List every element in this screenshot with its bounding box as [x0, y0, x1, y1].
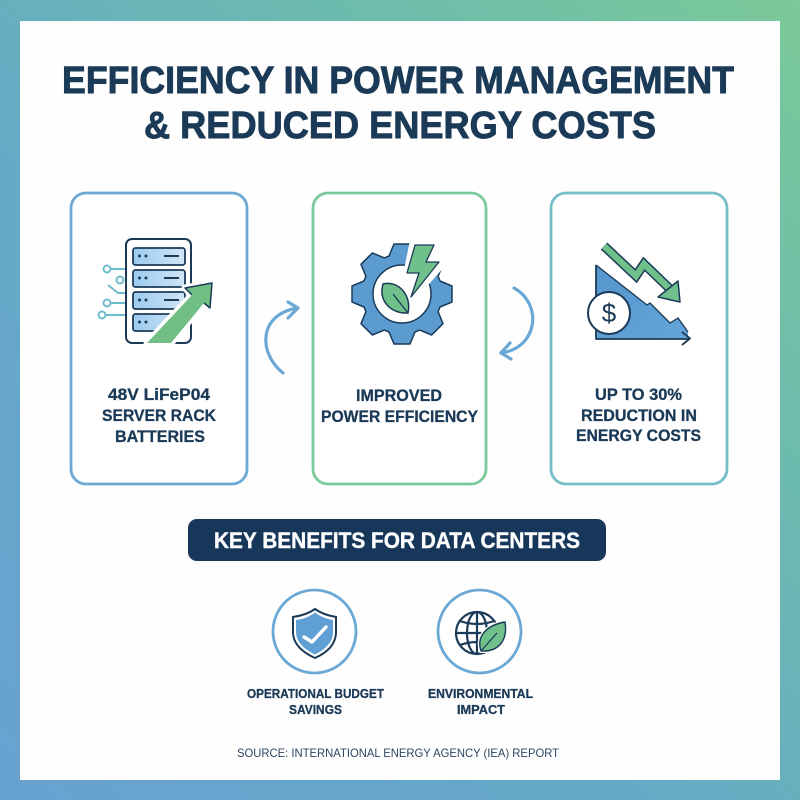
- source note: SOURCE: INTERNATIONAL ENERGY AGENCY (IEA) REPORT: [237, 746, 560, 760]
- icon: globe with leaf: [438, 590, 521, 673]
- heading: key benefits: KEY BENEFITS FOR DATA CENTERS: [214, 528, 580, 553]
- card label: [102, 386, 216, 446]
- card label: BATTERIES: [115, 428, 205, 446]
- title: & REDUCED ENERGY COSTS: [144, 105, 656, 147]
- card label: IMPROVED: [356, 387, 442, 405]
- card label: POWER EFFICIENCY: [321, 408, 478, 426]
- icon: falling cost chart with dollar coin: [588, 246, 690, 345]
- panel: energy cost reduction: [551, 193, 727, 484]
- icon: server rack with rising arrow: [98, 239, 212, 343]
- icon: shield with check: [273, 590, 356, 673]
- label: OPERATIONAL BUDGET: [247, 687, 384, 701]
- card label: [576, 386, 701, 445]
- label: ENVIRONMENTAL: [428, 687, 533, 701]
- card label: [321, 387, 478, 426]
- benefit: environmental impact: [428, 590, 533, 717]
- icon: gear with bolt and leaf: [352, 240, 452, 344]
- heading: key benefits: [188, 519, 606, 561]
- label: IMPACT: [457, 703, 505, 717]
- card label: UP TO 30%: [595, 386, 682, 404]
- title: [62, 60, 734, 147]
- benefit: operational budget savings: [247, 590, 384, 717]
- card label: ENERGY COSTS: [576, 427, 701, 445]
- icon: falling cost chart with dollar coin: $: [602, 298, 617, 328]
- card label: SERVER RACK: [102, 407, 216, 425]
- label: [247, 687, 384, 717]
- card label: 48V LiFeP04: [108, 386, 211, 404]
- arrow: efficiency to cost reduction: [501, 288, 533, 359]
- label: [428, 687, 533, 717]
- panel: improved power efficiency: [313, 193, 486, 484]
- label: SAVINGS: [289, 703, 342, 717]
- arrow: batteries to efficiency: [266, 302, 298, 373]
- panel: server rack batteries: [71, 193, 247, 484]
- card label: REDUCTION IN: [581, 407, 697, 425]
- title: EFFICIENCY IN POWER MANAGEMENT: [62, 60, 734, 102]
